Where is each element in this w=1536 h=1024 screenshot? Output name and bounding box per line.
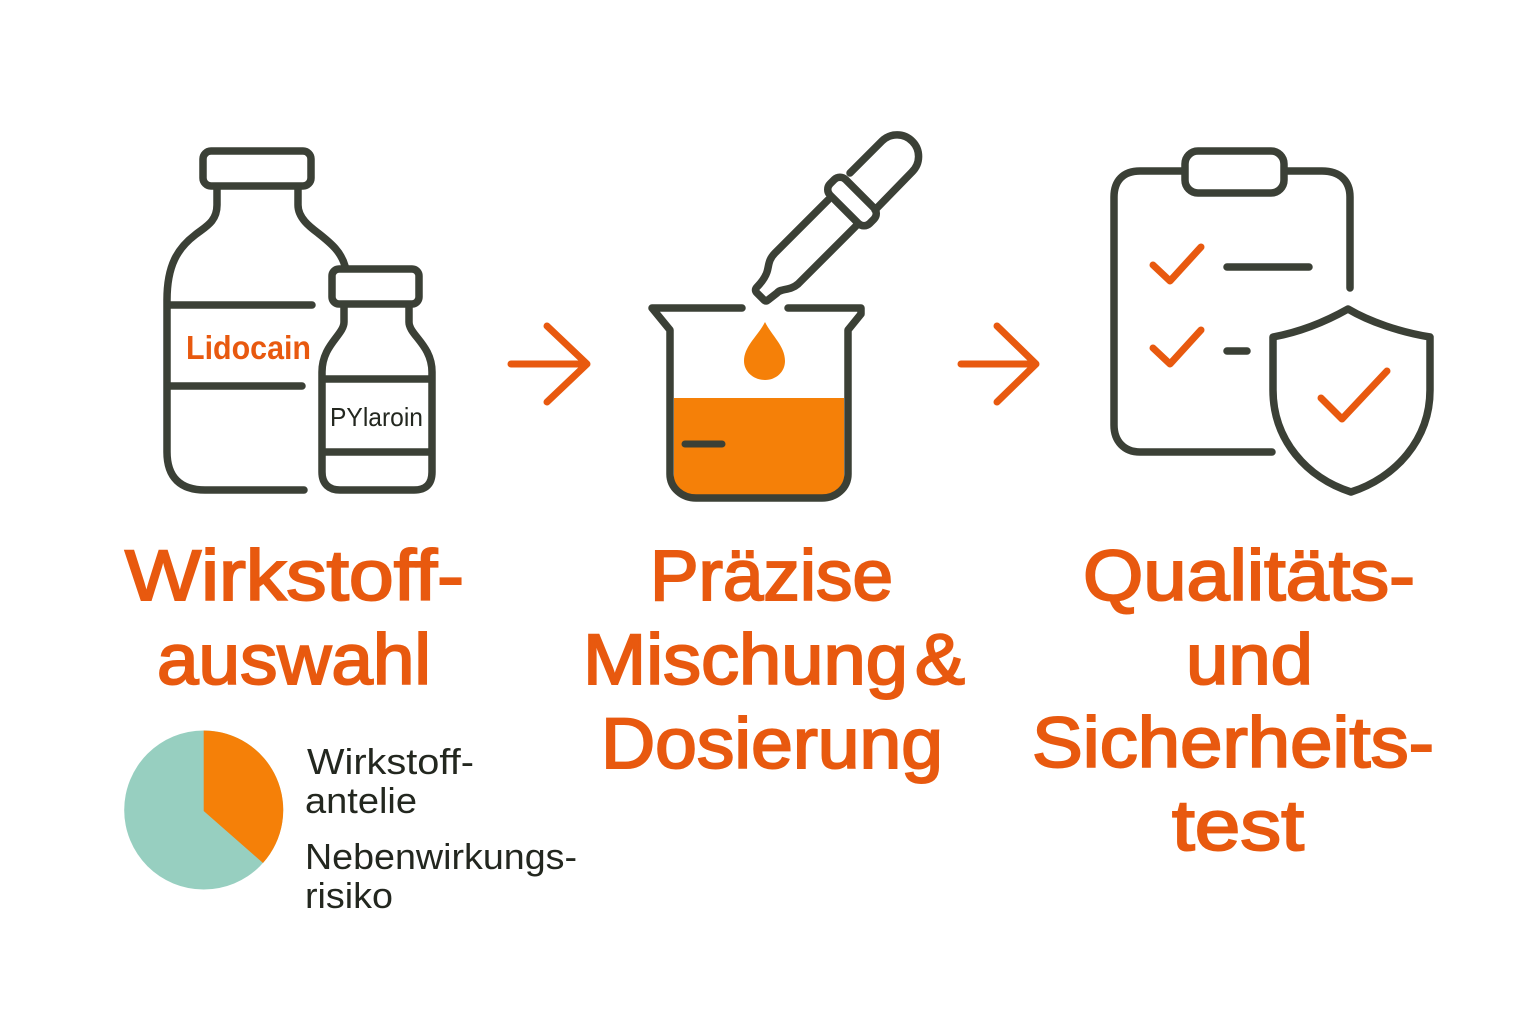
list lines bbox=[1227, 267, 1309, 351]
legend: risiko bbox=[305, 875, 393, 916]
heading: Qualitäts- und Sicherheitstest: Qualitäts- bbox=[1083, 537, 1415, 616]
large bottle bbox=[167, 151, 345, 490]
icon: beaker with dropper bbox=[652, 135, 919, 498]
icon: clipboard with shield bbox=[1114, 151, 1430, 492]
small bottle bbox=[322, 269, 432, 490]
legend bbox=[305, 741, 577, 916]
arrow 2 bbox=[961, 326, 1036, 402]
shield bbox=[1273, 309, 1430, 492]
legend: Wirkstoff- bbox=[307, 741, 474, 782]
beaker outline bbox=[652, 308, 861, 498]
checks bbox=[1153, 247, 1201, 364]
clip bbox=[1185, 151, 1284, 193]
heading: Präzise Mischung & Dosierung: & bbox=[915, 621, 965, 700]
label: Lidocain: Lidocain bbox=[186, 329, 311, 366]
heading: Präzise Mischung & Dosierung: Mischung bbox=[583, 621, 908, 700]
heading: Präzise Mischung & Dosierung: Dosierung bbox=[601, 705, 943, 784]
heading: Qualitäts- und Sicherheitstest: test bbox=[1172, 787, 1304, 866]
heading: Qualitäts- und Sicherheitstest bbox=[1032, 537, 1434, 866]
shield check bbox=[1321, 371, 1387, 419]
legend: antelie bbox=[305, 780, 417, 821]
clipboard bbox=[1114, 171, 1350, 452]
level mark bbox=[685, 440, 722, 448]
heading: Präzise Mischung & Dosierung bbox=[583, 537, 965, 784]
label: PYlaroin: PYlaroin bbox=[330, 402, 423, 432]
arrow 1 bbox=[511, 326, 587, 402]
pie chart bbox=[124, 730, 283, 890]
heading: Wirkstoffauswahl: auswahl bbox=[157, 621, 431, 700]
liquid bbox=[674, 398, 844, 497]
dropper bbox=[756, 135, 919, 301]
legend: Nebenwirkungs- bbox=[305, 836, 577, 877]
heading: Qualitäts- und Sicherheitstest: und bbox=[1186, 621, 1313, 700]
heading: Qualitäts- und Sicherheitstest: Sicherheits- bbox=[1032, 704, 1434, 783]
icon: drop bbox=[744, 322, 785, 380]
heading: Präzise Mischung & Dosierung: Präzise bbox=[650, 537, 893, 616]
heading: Wirkstoffauswahl: Wirkstoff- bbox=[125, 537, 464, 616]
icon: medicine bottles bbox=[167, 151, 432, 490]
heading: Wirkstoffauswahl bbox=[125, 537, 464, 700]
